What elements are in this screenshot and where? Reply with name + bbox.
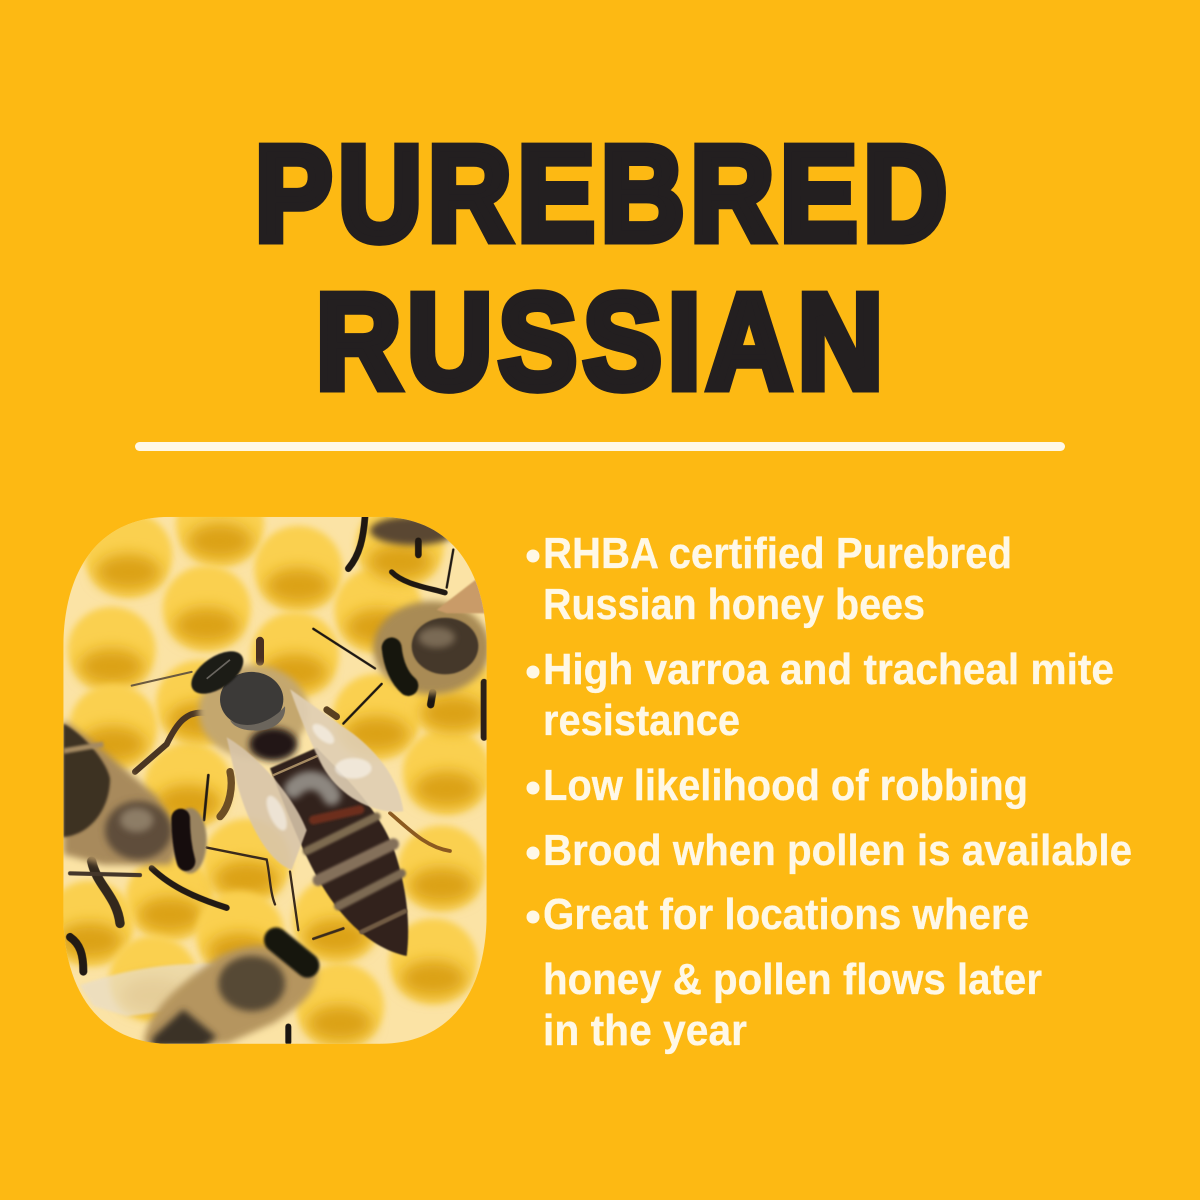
divider rule (135, 442, 1065, 451)
head (190, 650, 244, 695)
thorax (198, 665, 308, 758)
bullet: robbing: Low likelihood of robbing (543, 761, 1028, 810)
icon: upper right bee (313, 579, 490, 737)
icon: left bee (63, 720, 227, 971)
bullet: locations (526, 890, 1042, 1055)
abdomen (270, 748, 408, 956)
bullet: locations: Great for locations where (543, 890, 1029, 939)
bullet: mite resistance (526, 645, 1114, 745)
bullet: mite resistance: High varroa and tracheal mite (543, 645, 1114, 694)
honeycomb cells (64, 517, 487, 1044)
bullet: RHBA certified: Russian honey bees (543, 580, 925, 629)
bullet: RHBA certified (526, 529, 1012, 629)
bullet: locations: honey & pollen flows later (543, 955, 1042, 1004)
photo: bees on honeycomb (63, 516, 487, 1044)
wings (290, 689, 403, 812)
bullet: locations: in the year (543, 1006, 747, 1055)
bullet: mite resistance: resistance (543, 696, 740, 745)
bullet: RHBA certified: RHBA certified Purebred (543, 529, 1012, 578)
title (255, 118, 953, 417)
bullet: brood: Brood when pollen is available (543, 826, 1132, 875)
icon: queen bee (132, 641, 450, 956)
icon: bottom bee (80, 928, 343, 1047)
title: RUSSIAN (316, 266, 889, 417)
title: PUREBRED (255, 118, 953, 269)
bullet list (526, 529, 1132, 1055)
icon: top bee legs (348, 516, 457, 593)
